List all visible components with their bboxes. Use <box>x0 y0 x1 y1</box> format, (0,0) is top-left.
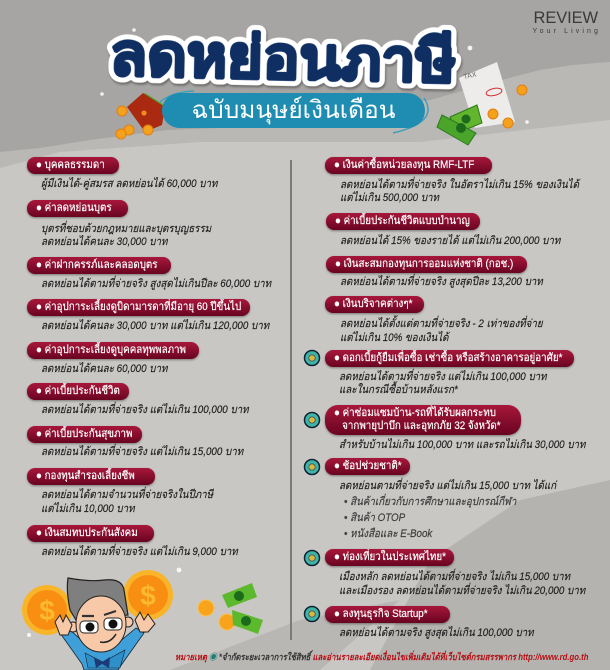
item: provident fund: แต่ไม่เกิน 10,000 บาท <box>41 503 135 515</box>
item: social security: ● เงินสมทบประกันสังคม <box>36 527 138 539</box>
item: prenatal: ลดหย่อนได้ตามที่จ่ายจริง สูงสุดไม่เกินปีละ 60,000 บาท <box>41 278 271 290</box>
item: RMF-LTF: ลดหย่อนได้ตามที่จ่ายจริง ในอัตราไม่เกิน 15% ของเงินได้ <box>340 179 579 191</box>
item: flood repairs: ● ค่าซ่อมแซมบ้าน-รถที่ได้รับผลกระทบ จากพายุปาบึก และอุทกภัย 32 จังหวัด* <box>334 407 501 432</box>
item: domestic travel: เมืองหลัก ลดหย่อนได้ตามที่จ่ายจริง ไม่เกิน 15,000 บาท <box>339 571 570 583</box>
item: startup <box>324 606 534 639</box>
item: child: ● ค่าลดหย่อนบุตร <box>36 202 112 214</box>
item: national savings fund: ● เงินสะสมกองทุนการออมแห่งชาติ (กอช.) <box>335 258 513 270</box>
item: pension insurance: ลดหย่อนได้ 15% ของรายได้ แต่ไม่เกิน 200,000 บาท <box>340 235 560 247</box>
title: ลดหย่อนภาษี <box>109 22 457 95</box>
subtitle banner <box>160 90 429 134</box>
item: disabled <box>26 342 200 375</box>
item: shopping: • สินค้าเกี่ยวกับการศึกษาและอุปกรณ์กีฬา <box>344 496 516 508</box>
right column: deductions <box>324 156 586 639</box>
item: prenatal <box>26 256 272 290</box>
item: shopping: ● ช้อปช่วยชาติ* <box>334 460 402 472</box>
item: social security <box>26 524 238 558</box>
item: startup: ลดหย่อนได้ตามจริง สูงสุดไม่เกิน 100,000 บาท <box>339 627 534 639</box>
item: mortgage interest: ● ดอกเบี้ยกู้ยืมเพื่อซื้อ เช่าซื้อ หรือสร้างอาคารอยู่อาศัย* <box>334 352 562 364</box>
item: domestic travel: ● ท่องเที่ยวในประเทศไทย* <box>334 551 446 563</box>
item: mortgage interest <box>324 350 576 396</box>
item: national savings fund: ลดหย่อนได้ตามที่จ่ายจริง สูงสุดปีละ 13,200 บาท <box>340 276 543 288</box>
item: shopping: • สินค้า OTOP <box>344 512 405 524</box>
item: individual: ● บุคคลธรรมดา <box>36 159 105 171</box>
icons: limited-time bells <box>304 350 320 622</box>
illustration: man with coins and banknotes: $ <box>140 580 156 611</box>
item: RMF-LTF <box>324 156 580 204</box>
logo: Review Your Living: Your Living <box>533 28 601 35</box>
item: shopping: ลดหย่อนตามที่จ่ายจริง แต่ไม่เกิน 15,000 บาท ได้แก่ <box>339 480 556 492</box>
item: mortgage interest: ลดหย่อนได้ตามที่จ่ายจริง แต่ไม่เกิน 100,000 บาท <box>339 371 547 383</box>
icon: tax paper, banknotes and coins: TAX <box>463 71 478 81</box>
item: child: บุตรที่ชอบด้วยกฎหมายและบุตรบุญธรรม <box>41 223 211 235</box>
item: child: ลดหย่อนได้คนละ 30,000 บาท <box>41 236 167 248</box>
item: flood repairs <box>324 404 586 451</box>
item: life insurance: ● ค่าเบี้ยประกันชีวิต <box>36 385 120 397</box>
item: donations <box>324 296 544 344</box>
item: child <box>26 200 212 248</box>
item: life insurance: ลดหย่อนได้ตามที่จ่ายจริง แต่ไม่เกิน 100,000 บาท <box>41 404 249 416</box>
title: ลดหย่อนภาษี <box>109 22 457 95</box>
item: donations: ● เงินบริจาคต่างๆ* <box>334 298 412 310</box>
item: startup: ● ลงทุนธุรกิจ Startup* <box>334 608 428 620</box>
logo: Review Your Living <box>532 9 601 35</box>
item: parents: ลดหย่อนได้คนละ 30,000 บาท แต่ไม่เกิน 120,000 บาท <box>41 320 269 332</box>
item: prenatal: ● ค่าฝากครรภ์และคลอดบุตร <box>36 259 158 271</box>
item: provident fund: ● กองทุนสำรองเลี้ยงชีพ <box>36 470 135 482</box>
item: parents: ● ค่าอุปการะเลี้ยงดูบิดามารดาที่มีอายุ 60 ปีขึ้นไป <box>36 301 241 313</box>
divider <box>290 160 292 640</box>
item: disabled: ● ค่าอุปการะเลี้ยงดูบุคคลทุพพลภาพ <box>36 344 186 356</box>
logo: Review Your Living: REVIEW <box>534 9 598 27</box>
subtitle banner: ฉบับมนุษย์เงินเดือน <box>191 97 396 124</box>
footnote: หมายเหตุ ◉ *จำกัดระยะเวลาการใช้สิทธิ์ และอ่านรายละเอียดเงื่อนไขเพิ่มเติมได้ที่เว็บไซต์กรมสรรพากร http://www.rd.go.th <box>175 652 588 662</box>
item: shopping <box>324 458 558 540</box>
item: pension insurance <box>324 212 561 247</box>
illustration: man with coins and banknotes <box>22 570 263 670</box>
item: donations: ลดหย่อนได้ตั้งแต่ตามที่จ่ายจริง - 2 เท่าของที่จ่าย <box>340 318 543 330</box>
item: flood repairs: สำหรับบ้านไม่เกิน 100,000 บาท และรถไม่เกิน 30,000 บาท <box>339 439 586 451</box>
item: donations: แต่ไม่เกิน 10% ของเงินได้ <box>340 332 449 344</box>
item: health insurance: ● ค่าเบี้ยประกันสุขภาพ <box>36 428 132 440</box>
item: pension insurance: ● ค่าเบี้ยประกันชีวิตแบบบำนาญ <box>335 215 470 227</box>
icon: tax paper, banknotes and coins <box>436 62 528 146</box>
item: shopping: • หนังสือและ E-Book <box>344 528 432 540</box>
item: health insurance: ลดหย่อนได้ตามที่จ่ายจริง แต่ไม่เกิน 15,000 บาท <box>41 446 243 458</box>
item: provident fund <box>26 468 214 515</box>
item: domestic travel <box>324 548 586 597</box>
left column: deductions <box>26 156 272 558</box>
item: life insurance <box>26 382 250 416</box>
item: health insurance <box>26 426 244 458</box>
icon: wallet and coins <box>116 93 164 140</box>
item: RMF-LTF: แต่ไม่เกิน 500,000 บาท <box>340 192 439 204</box>
item: individual <box>26 156 218 190</box>
item: parents <box>26 298 270 332</box>
illustration: man with coins and banknotes: $ <box>39 595 55 626</box>
item: provident fund: ลดหย่อนได้ตามจำนวนที่จ่ายจริงในปีภาษี <box>41 489 213 501</box>
item: mortgage interest: และในกรณีซื้อบ้านหลังแรก* <box>339 384 458 396</box>
item: RMF-LTF: ● เงินค่าซื้อหน่วยลงทุน RMF-LTF <box>334 159 474 171</box>
item: social security: ลดหย่อนได้ตามที่จ่ายจริง แต่ไม่เกิน 9,000 บาท <box>41 546 238 558</box>
item: disabled: ลดหย่อนได้คนละ 60,000 บาท <box>41 363 167 375</box>
item: domestic travel: และเมืองรอง ลดหย่อนได้ตามที่จ่ายจริง ไม่เกิน 20,000 บาท <box>339 585 585 597</box>
item: individual: ผู้มีเงินได้-คู่สมรส ลดหย่อนได้ 60,000 บาท <box>41 178 217 190</box>
item: national savings fund <box>324 256 544 288</box>
